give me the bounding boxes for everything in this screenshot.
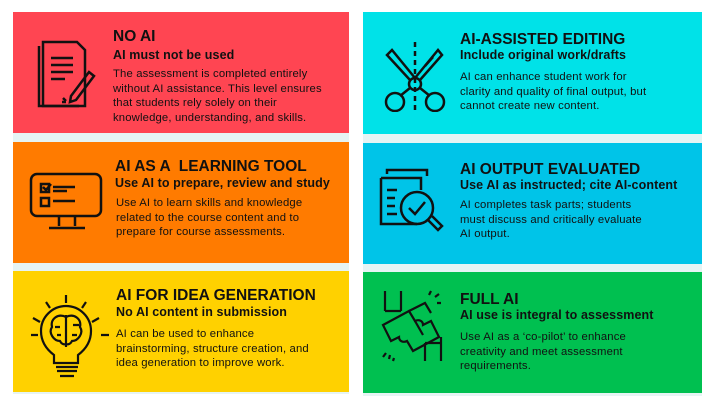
body text: without AI assistance. This level ensures (113, 83, 322, 95)
body text (460, 71, 646, 112)
panel: AI-assisted editing (363, 12, 702, 134)
body text (113, 68, 322, 124)
body text: related to the course content and to (116, 212, 299, 224)
panel: AI output evaluated (363, 143, 702, 264)
icon: monitor checklist (30, 172, 102, 230)
body text: must discuss and critically evaluate (460, 214, 642, 226)
body text: AI output. (460, 228, 510, 240)
body text: clarity and quality of final output, but (460, 86, 646, 98)
body text: Use AI as a ‘co-pilot’ to enhance (460, 331, 626, 343)
body text: creativity and meet assessment (460, 346, 623, 358)
body text (116, 197, 302, 238)
body text: that students rely solely on their (113, 97, 277, 109)
subtitle: AI must not be used (113, 48, 234, 62)
icon: documents with magnifier (380, 168, 444, 232)
body text: requirements. (460, 360, 531, 372)
title: FULL AI (460, 291, 519, 308)
panel: no AI (13, 12, 349, 133)
subtitle: No AI content in submission (116, 305, 287, 319)
body text (460, 331, 626, 372)
subtitle: Use AI as instructed; cite AI-content (460, 178, 677, 192)
body text: cannot create new content. (460, 100, 600, 112)
body text: Use AI to learn skills and knowledge (116, 197, 302, 209)
icon: hands with puzzle (382, 290, 442, 362)
panel: full AI (363, 272, 702, 393)
body text: idea generation to improve work. (116, 357, 285, 369)
body text: knowledge, understanding, and skills. (113, 112, 306, 124)
panel: idea generation (13, 271, 349, 392)
subtitle: Include original work/drafts (460, 48, 626, 62)
title: NO AI (113, 28, 155, 45)
body text: The assessment is completed entirely (113, 68, 307, 80)
title: AI FOR IDEA GENERATION (116, 287, 316, 304)
icon: lightbulb brain (31, 295, 109, 378)
body text (460, 199, 642, 240)
body text: brainstorming, structure creation, and (116, 343, 309, 355)
title: AI OUTPUT EVALUATED (460, 161, 640, 178)
subtitle: AI use is integral to assessment (460, 308, 654, 322)
title: AI-ASSISTED EDITING (460, 31, 625, 48)
title: AI AS A LEARNING TOOL (115, 158, 307, 175)
subtitle: Use AI to prepare, review and study (115, 176, 330, 190)
body text (116, 328, 309, 369)
body text: AI can enhance student work for (460, 71, 627, 83)
icon: scissors (384, 42, 446, 112)
icon: document with pen (38, 40, 96, 108)
body text: AI can be used to enhance (116, 328, 254, 340)
body text: prepare for course assessments. (116, 226, 285, 238)
body text: AI completes task parts; students (460, 199, 631, 211)
panel: learning tool (13, 142, 349, 263)
